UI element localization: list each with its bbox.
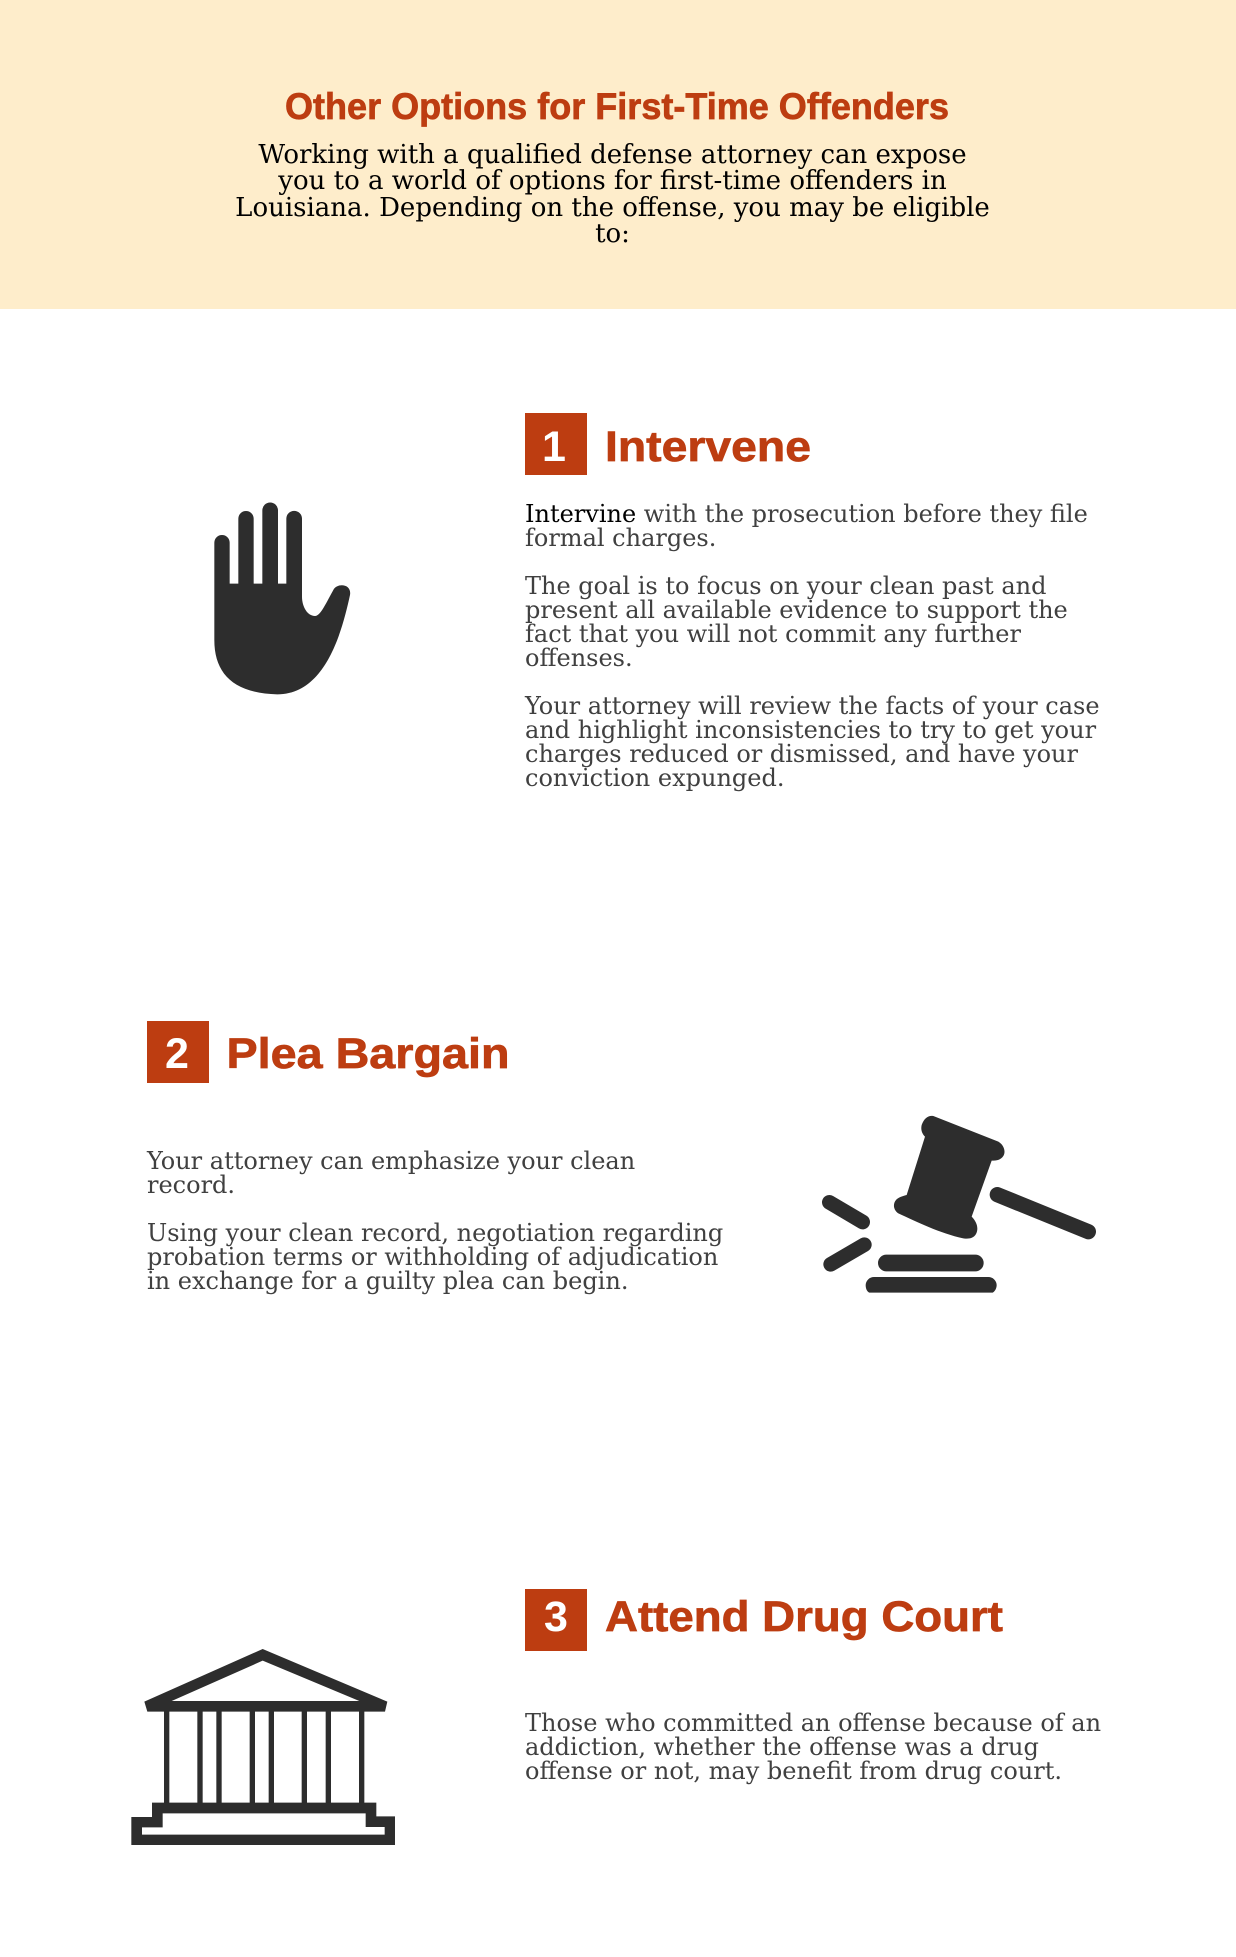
title: Other Options for First-Time Offenders [285,86,949,127]
intro text: Working with a qualified defense attorney can expose [258,140,967,170]
panel: option 1 intervene [214,413,1100,792]
heading: Plea Bargain: Plea Bargain [226,1030,510,1078]
icon: courthouse [131,1649,395,1845]
text block: intervene description: fact that you will not commit any further [525,620,1021,648]
heading: Intervene: Intervene [605,423,811,471]
text block: intervene description: Your attorney will review the facts of your case [525,692,1100,720]
intro text: Louisiana. Depending on the offense, you may be eligible [235,193,990,223]
intro text: you to a world of options for first-time offenders in [278,166,947,196]
number badge 2 [147,1021,209,1083]
panel: option 2 plea bargain [146,1021,1096,1295]
text block: intervene description: and highlight inconsistencies to try to get your [525,716,1096,744]
text block: intervene description [524,500,1100,792]
icon: raised hand [214,502,350,694]
heading: Attend Drug Court: Attend Drug Court [605,1593,1003,1641]
text block: intervene description: The goal is to focus on your clean past and [525,572,1046,600]
text block: intervene description: formal charges. [525,524,716,552]
text block: drug court description: offense or not, may benefit from drug court. [525,1757,1062,1785]
number badge 1 [525,413,587,475]
digit 3: 3 [544,1593,568,1641]
text block: intervene description: present all available evidence to support the [525,596,1068,624]
text block: intervene description: offenses. [525,644,633,672]
icon: gavel [822,1116,1096,1293]
text block: drug court description [525,1709,1101,1785]
text block: plea description [146,1147,723,1295]
intro text: to: [595,219,630,249]
text block: plea description: Using your clean record, negotiation regarding [147,1219,723,1247]
text block: plea description: Your attorney can emphasize your clean [147,1147,635,1175]
text block: drug court description: Those who committed an offense because of an [525,1709,1101,1737]
text block: plea description: in exchange for a guilty plea can begin. [147,1267,628,1295]
text block: intervene description: charges reduced or dismissed, and have your [525,740,1078,768]
text block: plea description: record. [147,1171,235,1199]
digit 1: 1 [542,423,566,471]
intro text [235,140,990,249]
number badge 3 [525,1589,587,1651]
panel: option 3 drug court [131,1589,1101,1845]
text block: intervene description: conviction expunged. [525,764,784,792]
text block: drug court description: addiction, whether the offense was a drug [525,1733,1039,1761]
digit 2: 2 [165,1030,189,1078]
text block: plea description: probation terms or withholding of adjudication [147,1243,718,1271]
panel: header banner [0,0,1236,309]
text block: intervene description: Intervine with the prosecution before they file [525,500,1088,528]
